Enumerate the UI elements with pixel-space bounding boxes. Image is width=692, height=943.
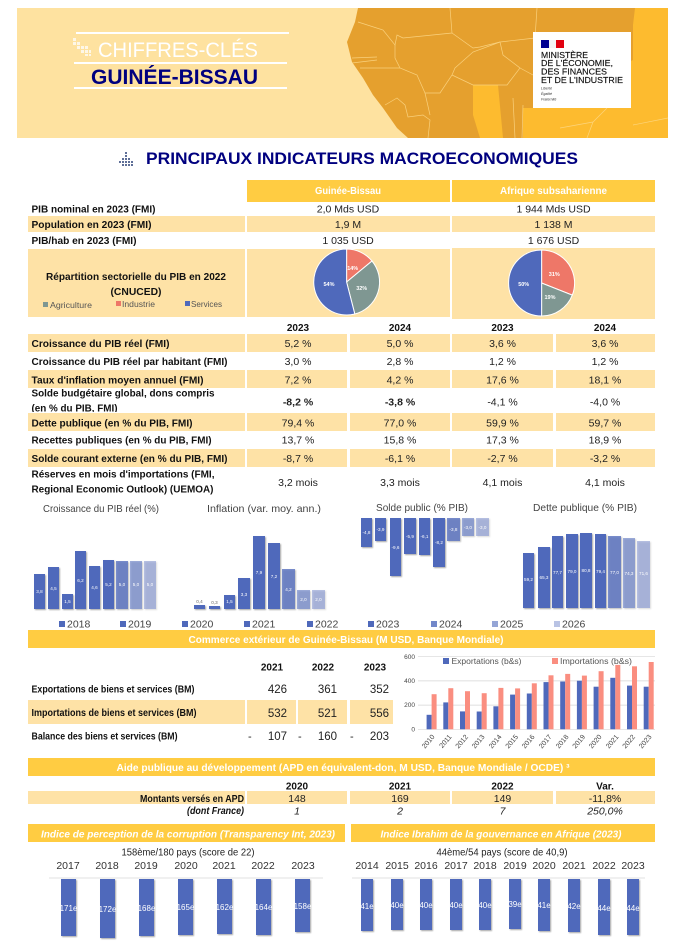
pie chart: Afrique subsaharienne xyxy=(509,250,575,316)
bar chart: rank: 168e xyxy=(138,904,156,913)
banner map of West Africa xyxy=(347,8,668,138)
ODA table: Var. xyxy=(596,782,614,792)
chart legend: years: 2023 xyxy=(376,618,400,630)
row: PIB nominal xyxy=(32,204,591,216)
bar chart: exportations et importations: 2020 xyxy=(588,734,604,750)
chart: croissance du PIB réel: 4,6 xyxy=(91,585,98,590)
trade table: Exportations de biens et services (BM) xyxy=(32,684,194,696)
chart: dette publique: 80,8 xyxy=(582,568,591,573)
pie chart: Afrique subsaharienne: 31% xyxy=(549,272,560,278)
pie chart: Afrique subsaharienne: 50% xyxy=(518,282,529,288)
row: recettes publiques xyxy=(32,434,621,446)
panel: indice de perception de la corruption xyxy=(28,824,345,938)
row: dette publique: Dette publique (en % du PIB, FMI) xyxy=(32,418,192,430)
year axis: 2023 xyxy=(291,860,315,872)
row: population: 1 138 M xyxy=(535,219,572,231)
year axis: 2018 xyxy=(473,860,497,872)
bar chart: exportations et importations: 2022 xyxy=(622,734,637,750)
ODA table: 1 xyxy=(294,806,300,818)
chart title: Dette publique (% PIB) xyxy=(533,502,637,514)
trade table: 352 xyxy=(370,684,389,696)
chart: inflation: 2,0 xyxy=(315,597,322,602)
year headers: 2023 xyxy=(287,323,310,334)
chart: croissance du PIB réel: 5,0 xyxy=(119,582,126,587)
row: croissance par habitant: 1,2 % xyxy=(489,356,516,368)
year axis: 2020 xyxy=(532,860,556,872)
bar chart: exportations et importations: 2016 xyxy=(521,734,537,750)
trade table: - xyxy=(298,731,302,743)
bar chart: rank: 158e xyxy=(294,902,312,911)
pie legend xyxy=(43,299,222,310)
row: dette publique: 79,4 % xyxy=(282,418,314,430)
chart title: Solde public (% PIB) xyxy=(376,502,468,514)
row: solde courant: -2,7 % xyxy=(487,453,518,465)
year headers: 2023 xyxy=(491,323,514,334)
row: solde budgétaire: -4,1 % xyxy=(487,396,518,408)
logo: ministère: ET DE L'INDUSTRIE xyxy=(541,76,623,85)
row: croissance: 5,2 % xyxy=(285,338,311,350)
pie chart: Guinée-Bissau: 14% xyxy=(347,266,358,272)
chart: solde public: -3,0 xyxy=(479,525,487,530)
chart legend: years: 2019 xyxy=(128,618,152,630)
panel: indice Ibrahim xyxy=(351,824,655,935)
year headers: 2024 xyxy=(389,323,412,334)
row: solde budgétaire: Solde budgétaire global, dons compris xyxy=(32,388,215,400)
logo: ministère xyxy=(533,32,631,108)
bar chart: exportations et importations: 2014 xyxy=(488,734,504,750)
row: sector breakdown xyxy=(28,248,655,319)
row: croissance par habitant: 1,2 % xyxy=(592,356,618,368)
chart legend: years: 2025 xyxy=(500,618,524,630)
chart: solde public: -3,9 xyxy=(377,527,385,532)
row: solde budgétaire xyxy=(32,388,620,414)
row: croissance par habitant xyxy=(32,356,618,368)
chart: solde public: -9,6 xyxy=(392,545,400,550)
bar chart: exportations et importations: 2019 xyxy=(572,734,587,750)
row: PIB par habitant: 1 035 USD xyxy=(322,235,374,247)
chart title: Inflation (var. moy. ann.) xyxy=(207,503,321,515)
trade table: 203 xyxy=(370,731,389,743)
chart legend: years: 2026 xyxy=(562,618,586,630)
row: croissance: 3,6 % xyxy=(489,338,516,350)
row: inflation: 18,1 % xyxy=(589,374,621,386)
chart: dette publique: 59,2 xyxy=(524,577,533,582)
pie chart: Afrique subsaharienne: 19% xyxy=(544,295,556,301)
bar chart: exportations et importations: 2012 xyxy=(455,734,470,750)
bar chart: rank: 41e xyxy=(537,901,551,910)
year axis: 2019 xyxy=(503,860,527,872)
chart: inflation: 3,3 xyxy=(241,592,248,597)
chart: croissance du PIB réel: 3,8 xyxy=(36,589,43,594)
bar chart: rank: 41e xyxy=(360,902,374,911)
row: dette publique: 59,7 % xyxy=(589,418,621,430)
year axis: 2022 xyxy=(251,860,275,872)
banner title lines xyxy=(74,32,289,89)
section heading: Aide publique au développement (APD en équivalent-don, M USD, Banque Mondiale / OCDE) ³ xyxy=(116,763,570,774)
row: dette publique: 59,9 % xyxy=(486,418,519,430)
chart: croissance du PIB réel: 6,2 xyxy=(77,578,84,583)
trade table: 361 xyxy=(318,684,337,696)
row: recettes publiques: Recettes publiques (en % du PIB, FMI) xyxy=(32,436,212,446)
year axis: 2017 xyxy=(444,860,468,872)
row: inflation: Taux d'inflation moyen annuel (FMI) xyxy=(32,376,204,386)
bar chart: rank: 172e xyxy=(99,905,117,914)
ODA table: 2 xyxy=(396,806,403,818)
row: sector breakdown: (CNUCED) xyxy=(110,287,162,298)
row: croissance par habitant: 2,8 % xyxy=(387,356,413,368)
year axis: 2023 xyxy=(621,860,645,872)
row: population: 1,9 M xyxy=(335,219,361,231)
bar chart: exportations et importations: 2017 xyxy=(538,734,554,750)
row: inflation: 17,6 % xyxy=(486,374,519,386)
chart: dette publique: 79,4 xyxy=(596,569,605,574)
trade table: 2023 xyxy=(364,662,387,674)
row: réserves: 4,1 mois xyxy=(585,477,625,489)
chart legend: years: 2024 xyxy=(439,618,463,630)
row: inflation: 7,2 % xyxy=(285,374,311,386)
row: recettes publiques: 13,7 % xyxy=(282,434,314,446)
row: solde budgétaire: -4,0 % xyxy=(590,396,620,408)
trade table: Importations de biens et services (BM) xyxy=(32,708,196,719)
ODA table: 2020 xyxy=(286,782,309,792)
row: PIB nominal: PIB nominal en 2023 (FMI) xyxy=(32,204,156,216)
row: solde courant: Solde courant externe (en % du PIB, FMI) xyxy=(32,454,227,465)
year axis: 2022 xyxy=(592,860,616,872)
ODA table: 250,0% xyxy=(586,806,623,818)
chart: dette publique: 71,6 xyxy=(639,571,648,576)
chart: dette publique: 79,0 xyxy=(568,569,577,574)
row: croissance: 3,6 % xyxy=(592,338,618,350)
bar chart: exportations et importations: 600 xyxy=(404,654,415,661)
chart: inflation: 0,3 xyxy=(211,600,218,605)
row: solde courant: -6,1 % xyxy=(385,453,415,465)
year axis: 2020 xyxy=(174,860,198,872)
bar chart: exportations et importations: 2023 xyxy=(638,734,654,750)
banner heading: chiffres-clés: CHIFFRES-CLÉS xyxy=(98,39,258,62)
row: sector breakdown: Répartition sectorielle du PIB en 2022 xyxy=(46,272,226,283)
chart legend: years: 2020 xyxy=(190,618,214,630)
chart legend: years: 2021 xyxy=(252,618,276,630)
ODA table: 2022 xyxy=(491,782,514,792)
year axis xyxy=(49,860,323,878)
trade table: - xyxy=(248,731,252,743)
logo: ministère: MINISTÈRE xyxy=(541,51,588,60)
chart: dette publique xyxy=(523,502,650,608)
section heading xyxy=(28,758,655,776)
chart: inflation: 7,9 xyxy=(256,570,263,575)
chart: croissance du PIB réel: 1,5 xyxy=(64,599,71,604)
ODA table xyxy=(28,782,655,818)
row: recettes publiques: 17,3 % xyxy=(486,434,519,446)
chart: solde public: -8,2 xyxy=(435,540,443,545)
bar chart: rank: 40e xyxy=(419,901,433,910)
row: croissance par habitant: Croissance du PIB réel par habitant (FMI) xyxy=(32,357,228,368)
trade table: 2022 xyxy=(312,662,335,674)
bar chart: exportations et importations: 2021 xyxy=(605,734,621,750)
chart: inflation xyxy=(194,503,325,609)
row: réserves: Regional Economic Outlook) (UEMOA) xyxy=(32,484,214,496)
row: réserves: 3,2 mois xyxy=(278,477,318,489)
year axis: 2016 xyxy=(414,860,438,872)
chart: inflation: 7,2 xyxy=(271,574,278,579)
chart: solde public xyxy=(361,502,489,576)
ODA table: 169 xyxy=(391,793,409,805)
bar chart: rank: 162e xyxy=(216,903,234,912)
panel: commerce extérieur xyxy=(28,630,655,750)
ODA table: Montants versés en APD xyxy=(140,794,244,805)
year axis: 2021 xyxy=(562,860,586,872)
chart: inflation: 2,0 xyxy=(300,597,307,602)
logo: ministère: Liberté xyxy=(541,86,552,90)
bar chart: rank: 171e xyxy=(60,904,78,913)
logo: ministère: DES FINANCES xyxy=(541,68,607,76)
ODA table: 149 xyxy=(494,793,511,805)
chart: inflation: 0,4 xyxy=(196,599,203,604)
chart: solde public: -3,0 xyxy=(464,525,472,530)
section heading xyxy=(28,630,655,648)
year axis: 2018 xyxy=(95,860,119,872)
bar chart: rank: 40e xyxy=(449,901,463,910)
row: PIB par habitant xyxy=(32,235,580,247)
chart legend: years: 2022 xyxy=(315,618,339,630)
chart: dette publique: 77,0 xyxy=(610,570,619,575)
bar chart: exportations et importations: 200 xyxy=(404,702,415,709)
bar chart: rank: 44e xyxy=(626,904,640,913)
chart legend: years: 2018 xyxy=(67,618,91,630)
column headers xyxy=(247,180,655,202)
chart: inflation: 4,2 xyxy=(285,587,292,592)
section heading: Indice de perception de la corruption (Transparency Int, 2023) xyxy=(41,830,336,840)
trade table: 107 xyxy=(268,731,287,743)
section heading: Commerce extérieur de Guinée-Bissau (M USD, Banque Mondiale) xyxy=(188,635,504,646)
rank subtitle: 158ème/180 pays (score de 22) xyxy=(122,848,254,858)
pie legend: Industrie xyxy=(122,299,155,309)
banner xyxy=(17,8,668,138)
bar chart: exportations et importations: 2011 xyxy=(438,734,454,750)
ODA table: 7 xyxy=(500,806,507,818)
bar chart: rank: 40e xyxy=(390,901,404,910)
bar chart: exportations et importations: 2013 xyxy=(471,734,487,750)
trade chart legend: Importations (b&s) xyxy=(560,657,632,666)
row: dette publique: 77,0 % xyxy=(384,418,416,430)
row: PIB par habitant: PIB/hab en 2023 (FMI) xyxy=(32,236,136,247)
row: population: Population en 2023 (FMI) xyxy=(32,220,152,231)
year axis: 2017 xyxy=(56,860,80,872)
row: solde budgétaire: (en % du PIB, FMI) xyxy=(32,404,118,414)
logo: ministère: Fraternité xyxy=(541,98,556,102)
row: croissance par habitant: 3,0 % xyxy=(285,356,311,368)
logo: ministère: DE L'ÉCONOMIE, xyxy=(541,59,613,68)
main title: PRINCIPAUX INDICATEURS MACROECONOMIQUES xyxy=(146,149,578,168)
trade table: - xyxy=(350,731,354,743)
row: solde courant: -3,2 % xyxy=(590,453,620,465)
chart legend: years xyxy=(59,618,586,630)
bar chart: exportations et importations: 2010 xyxy=(421,734,437,750)
column headers: Afrique subsaharienne xyxy=(500,186,607,197)
trade table: 426 xyxy=(268,684,287,696)
icon: dotted mark xyxy=(73,38,91,56)
trade table: 160 xyxy=(318,731,337,743)
year axis: 2014 xyxy=(355,860,379,872)
row: solde courant xyxy=(28,449,655,467)
bar chart: exportations et importations xyxy=(404,654,655,750)
pie chart: Guinée-Bissau xyxy=(314,249,380,315)
year axis xyxy=(352,860,645,878)
row: population xyxy=(28,216,655,232)
bar chart: exportations et importations: 2015 xyxy=(505,734,520,750)
year headers xyxy=(287,323,617,334)
row: réserves: 4,1 mois xyxy=(483,477,522,489)
chart: croissance du PIB réel: 5,0 xyxy=(147,582,154,587)
bar chart: rank: 165e xyxy=(177,903,195,912)
trade chart legend xyxy=(443,657,632,666)
row: solde budgétaire: -8,2 % xyxy=(283,396,314,408)
bar chart: rank: 44e xyxy=(597,904,611,913)
row: croissance xyxy=(28,334,655,352)
trade table: 556 xyxy=(370,708,389,720)
chart: solde public: -6,1 xyxy=(421,534,429,539)
trade table: 2021 xyxy=(261,662,284,674)
chart: croissance du PIB réel: 5,2 xyxy=(105,582,112,587)
chart: croissance du PIB réel xyxy=(34,503,159,609)
trade table: 532 xyxy=(268,708,287,720)
row: PIB nominal: 1 944 Mds USD xyxy=(516,204,591,216)
chart: inflation: 1,5 xyxy=(226,599,233,604)
chart: croissance du PIB réel: 4,5 xyxy=(50,586,57,591)
chart: croissance du PIB réel: 5,0 xyxy=(133,582,140,587)
row: réserves xyxy=(32,470,625,496)
pie legend: Agriculture xyxy=(50,300,92,310)
panel: key figures table xyxy=(0,180,692,496)
chart title: Croissance du PIB réel (%) xyxy=(43,503,159,515)
pie chart: Guinée-Bissau: 54% xyxy=(323,282,335,288)
trade chart legend: Exportations (b&s) xyxy=(452,657,522,666)
row: recettes publiques: 15,8 % xyxy=(384,434,416,446)
year headers: 2024 xyxy=(594,323,617,334)
pie legend: Services xyxy=(191,299,222,309)
section heading: Indice Ibrahim de la gouvernance en Afrique (2023) xyxy=(380,830,622,840)
ODA table: (dont France) xyxy=(187,806,245,817)
row: PIB nominal: 2,0 Mds USD xyxy=(317,204,380,216)
ODA table: 2021 xyxy=(389,782,412,792)
row: dette publique xyxy=(0,412,692,431)
section heading xyxy=(351,824,655,842)
row: inflation xyxy=(28,370,655,388)
logo: ministère: Égalité xyxy=(541,91,552,96)
row: réserves: 3,3 mois xyxy=(380,477,420,489)
row: solde courant: -8,7 % xyxy=(283,453,313,465)
trade table xyxy=(28,662,393,743)
rank subtitle: 44ème/54 pays (score de 40,9) xyxy=(436,848,568,858)
pie chart: Guinée-Bissau: 32% xyxy=(356,286,367,292)
chart: dette publique: 65,3 xyxy=(540,575,549,580)
ODA table: -11,8% xyxy=(589,793,621,805)
year axis: 2019 xyxy=(134,860,158,872)
row: recettes publiques: 18,9 % xyxy=(589,434,621,446)
bar chart: exportations et importations: 0 xyxy=(411,726,415,734)
year axis: 2015 xyxy=(385,860,409,872)
trade table: 521 xyxy=(318,708,337,720)
row: croissance: Croissance du PIB réel (FMI) xyxy=(32,339,170,350)
year axis: 2021 xyxy=(212,860,236,872)
bar chart: rank: 40e xyxy=(478,901,492,910)
banner heading: country: GUINÉE-BISSAU xyxy=(91,66,258,89)
bar chart: rank: 39e xyxy=(508,900,522,909)
chart: solde public: -4,8 xyxy=(363,530,371,535)
bar chart: rank: 42e xyxy=(567,902,581,911)
column headers: Guinée-Bissau xyxy=(315,186,381,197)
row: PIB par habitant: 1 676 USD xyxy=(528,235,580,247)
bar chart: exportations et importations: 2018 xyxy=(555,734,571,750)
row: réserves: Réserves en mois d'importations (FMI, xyxy=(32,470,215,480)
chart: dette publique: 74,3 xyxy=(625,571,634,576)
ODA table: 148 xyxy=(288,793,306,805)
row: solde budgétaire: -3,8 % xyxy=(385,396,416,408)
bar chart: rank: 164e xyxy=(255,903,273,912)
section heading xyxy=(28,824,345,842)
row: croissance: 5,0 % xyxy=(387,338,413,350)
bar chart: exportations et importations: 400 xyxy=(404,678,415,685)
chart: solde public: -5,9 xyxy=(406,534,414,539)
bar chart: rank xyxy=(360,879,640,935)
trade table: Balance des biens et services (BM) xyxy=(32,732,178,742)
row: inflation: 4,2 % xyxy=(387,374,413,386)
bar chart: rank xyxy=(60,879,312,938)
icon: title dots xyxy=(119,152,133,166)
panel: aide publique au développement xyxy=(28,758,655,818)
chart: solde public: -3,8 xyxy=(450,527,458,532)
chart: dette publique: 77,7 xyxy=(553,570,562,575)
